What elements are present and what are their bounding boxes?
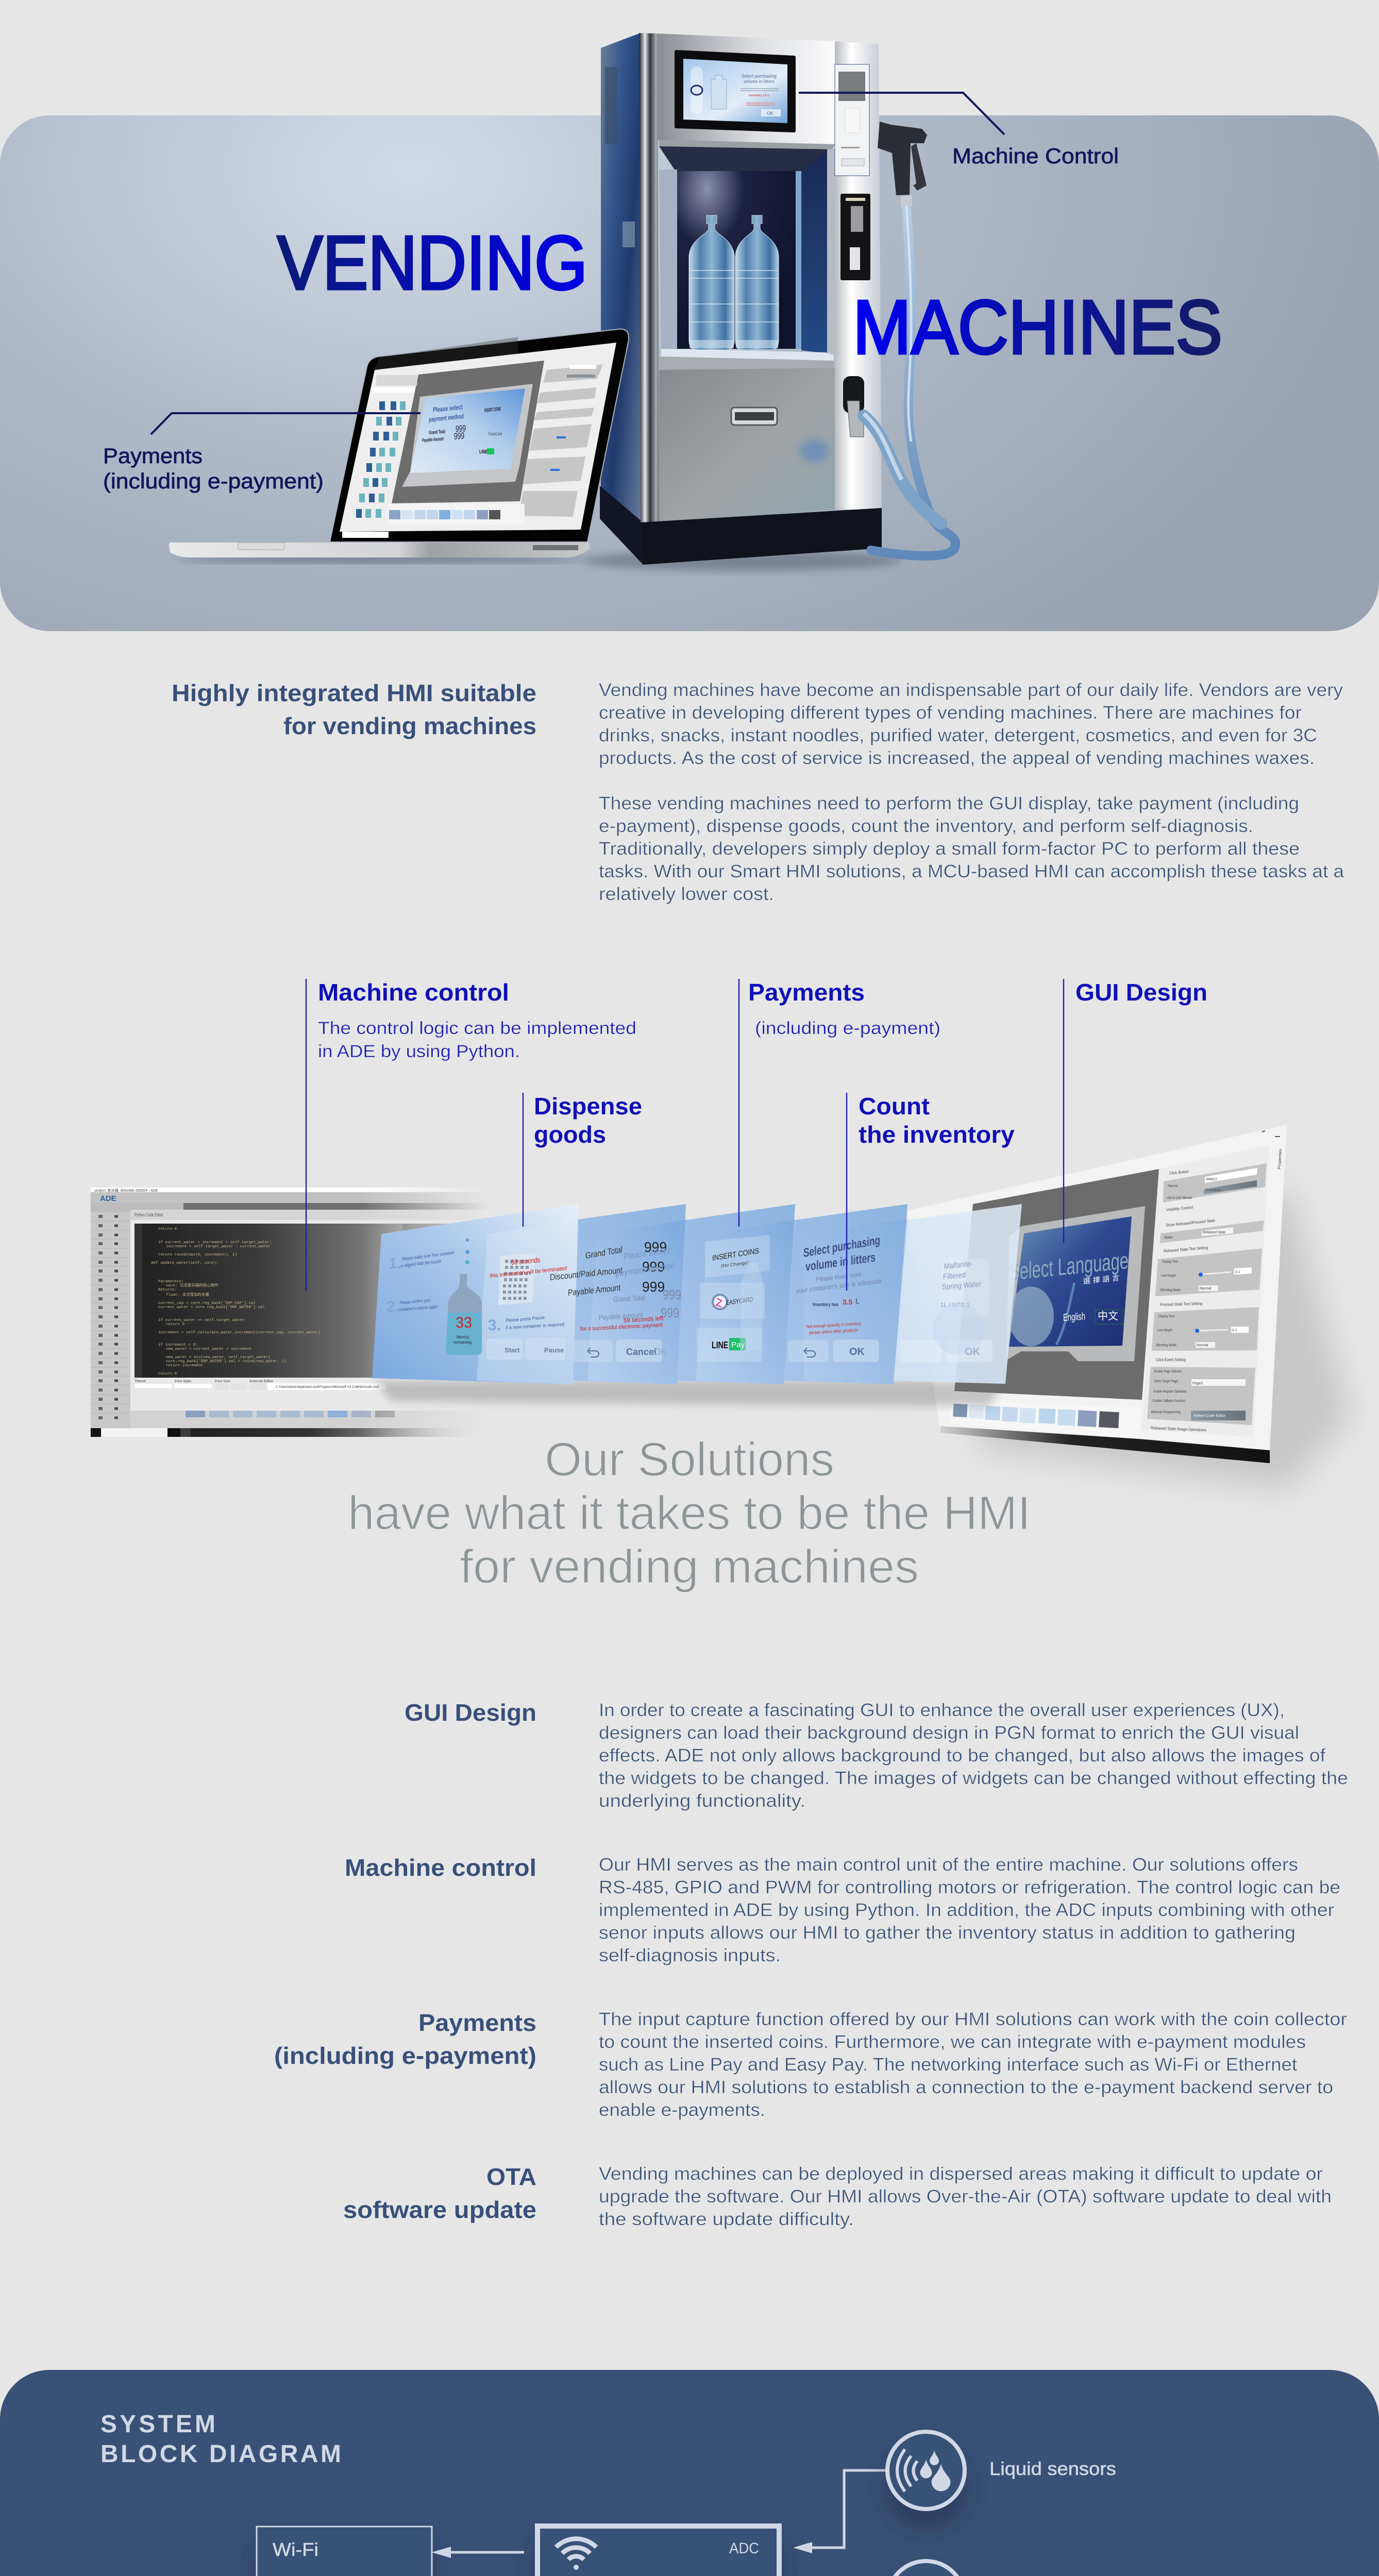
- glass panel: payments amounts: 999: [642, 1259, 665, 1275]
- properties panel: Line Height:: [1157, 1329, 1173, 1332]
- properties panel: Released State Image Operations: [1151, 1426, 1206, 1432]
- heading: machine control: Machine control: [345, 1854, 536, 1881]
- HMI language screen: 選擇語言: [1083, 1274, 1119, 1285]
- shadow behind right window: [979, 1185, 1350, 1489]
- icon: water bottle remaining level: litter(s): [457, 1335, 469, 1340]
- properties panel: Line Height:: [1161, 1274, 1176, 1278]
- pointer lines: [306, 979, 1064, 1291]
- block: Wi-Fi: [257, 2527, 432, 2576]
- heading: payments: [274, 2009, 536, 2069]
- screenshot: ADE python code editor: project_飲水機_800x480-250529 - ADE: [95, 1188, 158, 1193]
- laptop HMI design: INSERT COINS: [484, 406, 501, 414]
- laptop HMI design: 999: [456, 423, 466, 434]
- heading: payments: (including e-payment): [274, 2042, 536, 2069]
- text block: payments: allows our HMI solutions to establish a connection to the e-payment backend server to: [599, 2077, 1333, 2097]
- block: Wi-Fi: Wi-Fi: [273, 2539, 318, 2560]
- laptop HMI design: Please select: [433, 403, 463, 414]
- text block: intro paragraph 1: drinks, snacks, instant noodles, purified water, detergent, cosmetics, and even for 3C: [599, 725, 1317, 745]
- glass panel: count the inventory: please select other products: [809, 1327, 858, 1335]
- text block: OTA: [599, 2164, 1332, 2229]
- python code lines: current_cap = core.reg_bank['DRP_CAP'].val: [158, 1301, 256, 1306]
- python code lines: float: 本次增加的水量: [166, 1292, 210, 1297]
- block: HMI: ADC: [729, 2540, 759, 2557]
- screenshot: ADE python code editor: [91, 1188, 490, 1440]
- properties panel: Properties: [1277, 1149, 1283, 1170]
- glass panel: select water: Spring Water: [942, 1280, 981, 1292]
- leader line: payments: [151, 413, 421, 434]
- screenshot: ADE python code editor: Python Code Editor: [134, 1212, 163, 1217]
- python code lines: [151, 1227, 321, 1376]
- glass panel: dispense goods: Please make sure Your container: [402, 1250, 455, 1262]
- callout: machine control: in ADE by using Python.: [318, 1042, 520, 1061]
- glass panel: count the inventory: your container's size is adequate: [796, 1277, 882, 1295]
- heading: OTA: software update: [343, 2196, 536, 2223]
- heading: our solutions: have what it takes to be the HMI: [348, 1487, 1031, 1539]
- glass panel: select water: Filtered: [943, 1271, 966, 1281]
- title: machines: MACHINES: [853, 285, 1222, 370]
- properties panel: 0.1: [1232, 1329, 1237, 1332]
- callout: GUI design: GUI Design: [1075, 979, 1207, 1006]
- glass panel: payment methods: INSERT COINS: [712, 1247, 759, 1263]
- illustration: vending machine: [582, 33, 955, 571]
- HMI language screen: 中文: [1098, 1310, 1118, 1322]
- glass panel: count the inventory: Please make sure: [816, 1270, 861, 1283]
- glass panel: dispense goods: 2.: [386, 1298, 399, 1315]
- python code lines: if current_water + increment > self.target_water:: [158, 1241, 272, 1245]
- laptop widget icons: [356, 375, 417, 518]
- text block: machine control: self-diagnosis inputs.: [599, 1945, 781, 1965]
- section: features: [274, 1699, 1348, 2229]
- glass panel: dispense goods: container's volume again: [399, 1304, 438, 1312]
- heading: our solutions: for vending machines: [460, 1540, 919, 1593]
- glass panel: payments amounts: 999: [644, 1239, 667, 1255]
- python code lines: return 0: [166, 1323, 185, 1327]
- python code lines: if increment > 0:: [158, 1343, 198, 1347]
- heading: highly integrated HMI: [172, 680, 536, 739]
- glass panel: select water: Maifanite-: [944, 1259, 973, 1271]
- arrow: liquid sensors to ADC: [793, 2470, 886, 2553]
- glass panel: payments amounts: 999: [663, 1287, 681, 1302]
- properties panel: Page2: [1192, 1382, 1203, 1385]
- icon: water bottles: [689, 215, 779, 350]
- text block: OTA: the software update difficulty.: [599, 2209, 854, 2229]
- glass panel: payment methods: LINE: [712, 1340, 728, 1350]
- glass panel: select water: [894, 1204, 1022, 1384]
- laptop HMI design: LINE: [479, 449, 487, 455]
- block: HMI: [537, 2526, 779, 2576]
- glass panel: payments amounts: Payable Amount: [568, 1283, 620, 1298]
- glass panel: payments amounts: Grand Total: [613, 1293, 645, 1303]
- glass panel: payment methods: Pay: [731, 1341, 745, 1349]
- icon: water bottle remaining level: remaining: [453, 1340, 472, 1345]
- text block: GUI design: In order to create a fascinating GUI to enhance the overall user experiences (UX),: [599, 1700, 1285, 1720]
- text block: payments: such as Line Pay and Easy Pay. The networking interface such as Wi-Fi or Ethernet: [599, 2055, 1297, 2075]
- callout: machine control: The control logic can be implemented: [318, 1019, 636, 1038]
- callout: payments: Payments: [748, 979, 865, 1006]
- python code lines: return 0: [158, 1227, 177, 1231]
- python code lines: return round(max(0, increment), 1): [158, 1253, 237, 1257]
- text block: intro paragraph 2: e-payment), dispense goods, count the inventory, and perform self-diagnosis.: [599, 816, 1253, 836]
- glass panel: dispense goods: is aligned With the nozzle: [401, 1259, 441, 1268]
- arrow: HMI to Wi-Fi: [432, 2547, 524, 2558]
- glass panel: count the inventory: Inventory has: [813, 1302, 838, 1307]
- properties panel: Visibility Control: [1166, 1205, 1193, 1212]
- icon: water bottle remaining level: [446, 1239, 482, 1355]
- heading: OTA: [343, 2163, 536, 2223]
- glass panel: count the inventory: 3.5: [843, 1298, 853, 1306]
- title: vending: VENDING: [277, 221, 587, 306]
- taskbar band: [940, 1426, 1270, 1463]
- text block: intro paragraph 1: products. As the cost of service is increased, the appeal of vending machines waxes.: [599, 748, 1315, 768]
- properties panel: Released State Text Setting: [1164, 1245, 1208, 1253]
- python code lines: def update_water(self, core):: [151, 1261, 218, 1265]
- screenshot: ADE python code editor: External Editor: [249, 1380, 274, 1383]
- glass panel: dispense goods: Please press Pause: [506, 1315, 545, 1323]
- leader line: machine control: [799, 93, 1004, 134]
- properties panel: Click Button: [1169, 1169, 1189, 1176]
- callout: dispense goods: Dispense: [534, 1093, 642, 1120]
- thumbnail strip: [950, 1400, 1140, 1439]
- callout: dispense goods: [534, 1093, 642, 1148]
- glass panel: payments amounts: [550, 1204, 686, 1384]
- text block: GUI design: underlying functionality.: [599, 1791, 805, 1811]
- python code lines: increment = self.calculate_water_increment(current_cap, current_water): [158, 1331, 321, 1335]
- label: liquid sensors: Liquid sensors: [989, 2458, 1116, 2479]
- glass panel: payment methods: [677, 1204, 795, 1384]
- laptop HMI design: payment method: [429, 412, 464, 423]
- python code lines: current_water = core.reg_bank['DRP_WATER'].val: [158, 1306, 265, 1310]
- python code lines: core.reg_bank['DRP_WATER'].val = round(new_water, 1): [166, 1360, 287, 1364]
- properties panel: Enable Register Operation:: [1153, 1390, 1187, 1394]
- glass panel: payments amounts: payment method: [615, 1260, 675, 1279]
- machine HMI screen: Select purchasing: [742, 74, 777, 79]
- laptop HMI design: 999: [454, 430, 464, 442]
- label: payments: [103, 444, 324, 493]
- glass panel: payments amounts: for a successful electronic payment: [580, 1322, 663, 1332]
- glass panel: dispense goods: 1.: [389, 1255, 401, 1272]
- text block: OTA: upgrade the software. Our HMI allows Over-the-Air (OTA) software update to deal with: [599, 2187, 1332, 2207]
- glass panel: dispense goods: Pause: [544, 1346, 564, 1354]
- text block: intro paragraph 2: relatively lower cost.: [599, 884, 774, 904]
- text block: intro paragraph 1: [599, 680, 1343, 768]
- text block: intro paragraph 1: creative in developing different types of vending machines. There are machines for: [599, 703, 1302, 723]
- python code lines: new_water = current_water + increment: [166, 1347, 252, 1351]
- monitor frame: [1006, 1206, 1145, 1361]
- section: solutions graphic: [91, 979, 1350, 1489]
- screenshot: ADE python code editor: Font Size:: [215, 1380, 231, 1383]
- glass panel: payment methods: (No Change): [721, 1260, 749, 1268]
- glass panel: dispense goods: [372, 1204, 578, 1384]
- python code lines: increment = self.target_water - current_water: [166, 1245, 271, 1249]
- text block: payments: [599, 2009, 1347, 2120]
- glass panel: payments amounts: 999: [661, 1305, 679, 1320]
- glass panel: dispense goods: 3.: [488, 1317, 501, 1334]
- heading: GUI design: GUI Design: [405, 1699, 536, 1726]
- HMI language screen: Select Language: [1009, 1247, 1129, 1285]
- glass panel: count the inventory: OK: [849, 1346, 865, 1358]
- text block: GUI design: effects. ADE not only allows background to be changed, but also allows the images of: [599, 1745, 1325, 1766]
- callout: machine control: Machine control: [318, 979, 509, 1006]
- text block: payments: to count the inserted coins. Furthermore, we can integrate with e-payment modules: [599, 2032, 1306, 2052]
- block diagram background: [0, 2370, 1379, 2576]
- text block: intro paragraph 2: tasks. With our Smart HMI solutions, a MCU-based HMI can accomplish these tasks at a: [599, 861, 1344, 882]
- screenshot: GUI designer window: [907, 1125, 1287, 1463]
- properties panel: Behavior Programming:: [1151, 1411, 1181, 1414]
- heading: system block diagram: [100, 2411, 341, 2468]
- glass panel: dispense goods: 60 seconds: [511, 1256, 540, 1266]
- text block: payments: enable e-payments.: [599, 2100, 765, 2120]
- heading: highly integrated HMI: for vending machines: [283, 713, 536, 739]
- callout: machine control: [318, 979, 636, 1061]
- text block: machine control: Our HMI serves as the main control unit of the entire machine. Our solutions offers: [599, 1855, 1298, 1875]
- callout: count the inventory: Count: [859, 1093, 930, 1120]
- callout: dispense goods: goods: [534, 1121, 606, 1148]
- HMI language screen: English: [1063, 1311, 1085, 1324]
- heading: system block diagram: SYSTEM: [100, 2411, 215, 2438]
- glass panel: payments amounts: Grand Total: [585, 1245, 623, 1261]
- machine front service column: [835, 64, 870, 437]
- properties panel: Click Event Setting: [1156, 1358, 1186, 1362]
- properties panel: 0.1: [1235, 1270, 1240, 1274]
- text block: intro paragraph 2: Traditionally, developers simply deploy a small form-factor PC to perform all these: [599, 839, 1300, 859]
- text block: GUI design: [599, 1700, 1348, 1811]
- text block: machine control: RS-485, GPIO and PWM for controlling motors or refrigeration. The control logic can be: [599, 1877, 1340, 1897]
- icon: wifi: [556, 2539, 596, 2569]
- machine HMI screen: Inventory 3.5 L: [749, 94, 770, 97]
- properties panel: Select Target Page:: [1154, 1380, 1179, 1383]
- text block: GUI design: designers can load their background design in PGN format to enrich the GUI visual: [599, 1723, 1299, 1743]
- glass panel: payments amounts: Please select: [624, 1245, 670, 1262]
- text block: intro paragraph 1: Vending machines have become an indispensable part of our daily life. Vendors are very: [599, 680, 1343, 700]
- text block: intro paragraph 2: These vending machines need to perform the GUI display, take payment (including: [599, 793, 1299, 814]
- text block: OTA: Vending machines can be deployed in dispersed areas making it difficult to update or: [599, 2164, 1323, 2184]
- glass panel: dispense goods: Please confirm your: [400, 1297, 431, 1306]
- python code lines: return increment: [166, 1364, 203, 1368]
- glass panel: count the inventory: Not enough quantity in inventory,: [806, 1321, 862, 1329]
- callout: payments: [748, 979, 940, 1038]
- glass panel: dispense goods: if a new container is required: [506, 1321, 564, 1330]
- text block: payments: The input capture function offered by our HMI solutions can work with the coin collector: [599, 2009, 1347, 2029]
- python code lines: new_water = min(new_water, self.target_water): [166, 1355, 271, 1360]
- glass panel: count the inventory: volume in litters: [805, 1250, 876, 1274]
- glass panel: payments amounts: Discount/Paid Amount: [550, 1265, 623, 1282]
- properties panel: Pressed State Text Setting: [1160, 1301, 1202, 1307]
- label: payments: Payments: [103, 444, 203, 468]
- laptop HMI design: [402, 384, 533, 487]
- heading: payments: Payments: [418, 2009, 536, 2036]
- heading: highly integrated HMI: Highly integrated HMI suitable: [172, 680, 536, 706]
- glass panel: count the inventory: L: [855, 1297, 860, 1305]
- illustration: laptop: [169, 329, 629, 563]
- python code lines: if current_water >= self.target_water:: [158, 1318, 246, 1323]
- properties panel: Name:: [1168, 1184, 1179, 1188]
- machine HMI screen: [676, 52, 794, 131]
- shadow beneath glass panels: [374, 1381, 1005, 1406]
- laptop thumbnails: [388, 504, 525, 524]
- properties panel: [1147, 1131, 1283, 1432]
- laptop HMI design: Payable Amount: [422, 436, 444, 444]
- properties panel: Blending Mode:: [1156, 1344, 1177, 1347]
- python code lines: Returns:: [158, 1288, 177, 1292]
- glass panel: select water: OK: [965, 1346, 981, 1358]
- glass panel: payments amounts: 999: [642, 1279, 665, 1295]
- laptop properties panel: [518, 364, 603, 517]
- properties panel: Python Code Editor: [1193, 1414, 1226, 1418]
- properties panel: Enable Callback Function:: [1153, 1399, 1186, 1403]
- hero background panel: [0, 115, 1379, 631]
- properties panel: State:: [1164, 1236, 1173, 1240]
- callout: count the inventory: the inventory: [859, 1121, 1015, 1148]
- laptop HMI design: Grand Total: [429, 429, 445, 436]
- icon: liquid sensors: [887, 2432, 965, 2509]
- glass panel: count the inventory: [784, 1204, 907, 1384]
- text block: machine control: implemented in ADE by using Python. In addition, the ADC inputs combining with other: [599, 1900, 1334, 1920]
- properties panel: Display Text:: [1162, 1260, 1179, 1264]
- glass panel: payments amounts: 59 seconds left: [624, 1314, 664, 1324]
- glass panel: select water: 1L / NTS 1: [940, 1301, 970, 1309]
- laptop HMI design: EasyCard: [489, 431, 502, 436]
- heading: our solutions: [348, 1433, 1031, 1593]
- panel: system block diagram: [0, 2370, 1379, 2576]
- machine HMI screen: OK: [767, 111, 773, 116]
- properties panel: Link to User Manual:: [1167, 1196, 1192, 1200]
- icon: water bottle remaining level: 33: [456, 1314, 472, 1331]
- glass panel: payments amounts: Cancel: [626, 1347, 657, 1357]
- HMI language screen: [1008, 1216, 1132, 1347]
- python code lines: Parameters:: [158, 1280, 184, 1284]
- callout: count the inventory: [859, 1093, 1015, 1148]
- glass panel: dispense goods: Start: [504, 1346, 520, 1354]
- properties panel: Enable Page Selector:: [1154, 1370, 1182, 1374]
- properties panel: Released State: [1203, 1231, 1225, 1234]
- properties panel: Normal: [1197, 1344, 1208, 1347]
- label: payments: (including e-payment): [103, 469, 324, 493]
- screenshot: ADE python code editor: Font Style:: [175, 1380, 192, 1383]
- text block: machine control: [599, 1855, 1340, 1965]
- glass panel: count the inventory: Select purchasing: [803, 1233, 880, 1260]
- screenshot: ADE python code editor: C:\Users\admin\AppData\Local\Programs\Microsoft VS Code\bin\code.cmd: [276, 1385, 379, 1389]
- properties panel: Display Text:: [1158, 1315, 1175, 1318]
- properties panel: Normal: [1200, 1287, 1212, 1291]
- text block: machine control: senor inputs allows our HMI to gather the inventory status in addition to gathering: [599, 1923, 1296, 1943]
- section: intro: [172, 680, 1344, 904]
- properties panel: IRMC2: [1206, 1178, 1217, 1181]
- python code lines: return 0: [158, 1372, 177, 1376]
- panel: hero: [0, 33, 1379, 631]
- heading: OTA: OTA: [486, 2163, 536, 2190]
- callout: payments: (including e-payment): [755, 1019, 940, 1038]
- label: machine control: Machine Control: [952, 144, 1119, 168]
- screenshot: ADE python code editor: Theme:: [134, 1380, 147, 1383]
- properties panel: Connect...: [1206, 1189, 1223, 1192]
- glass panel: payment methods: EASYCARD: [726, 1295, 753, 1307]
- icon: coin collectors: [887, 2561, 965, 2576]
- text block: GUI design: the widgets to be changed. The images of widgets can be changed without effecting the: [599, 1768, 1348, 1788]
- glass panel: payments amounts: OK: [653, 1347, 667, 1357]
- heading: our solutions: Our Solutions: [545, 1433, 834, 1486]
- icon: dispenser hoses: [864, 200, 955, 556]
- properties panel: Blending Mode:: [1161, 1289, 1181, 1292]
- screenshot: ADE python code editor: ADE: [100, 1194, 116, 1203]
- heading: system block diagram: BLOCK DIAGRAM: [100, 2441, 341, 2468]
- python code lines: core: 包含暫存器的核心物件: [166, 1282, 219, 1288]
- icon: nozzle gun: [878, 122, 927, 206]
- text block: intro paragraph 2: [599, 793, 1344, 904]
- glass panel: dispense goods: this transaction will be terminated: [490, 1265, 567, 1279]
- glass panel: payments amounts: Payable Amount: [599, 1311, 643, 1321]
- machine HMI screen: volume in litters: [744, 79, 775, 84]
- properties panel: Show Released/Pressed State: [1166, 1218, 1215, 1228]
